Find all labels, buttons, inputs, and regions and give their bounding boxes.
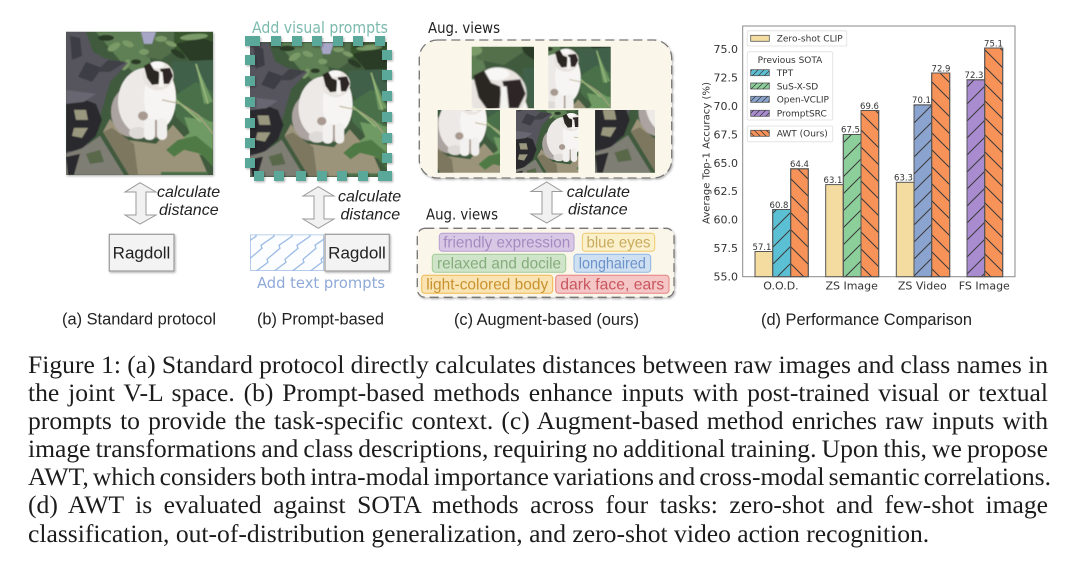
- x axis labels: ZS Image: [825, 280, 878, 292]
- legend: previous SOTA: PromptSRC: [777, 110, 827, 120]
- bar value labels: 60.8: [770, 201, 788, 211]
- bar value labels: 64.4: [790, 160, 809, 170]
- view: bench and cat crop: [516, 110, 578, 173]
- figure caption: [28, 350, 1051, 548]
- bar value labels: [753, 40, 1003, 253]
- caption a: (a) Standard protocol: [62, 310, 216, 328]
- x axis labels: O.O.D.: [763, 280, 799, 292]
- figure caption: AWT, which considers both intra-modal importance variations and cross-modal semantic correlations.: [28, 462, 1051, 491]
- figure caption: prompts to provide the task-specific context. (c) Augment-based method enriches raw inputs with: [28, 406, 1048, 435]
- y axis ticks: 67.5: [714, 128, 738, 141]
- bar value labels: 67.5: [841, 126, 860, 136]
- text prompt block: [250, 234, 324, 271]
- figure caption: Figure 1: (a) Standard protocol directly calculates distances between raw images and class names in: [28, 350, 1048, 379]
- figure caption: the joint V-L space. (b) Prompt-based methods enhance inputs with post-trained visual or textual: [28, 378, 1048, 407]
- panel: performance comparison chart: [702, 26, 1015, 329]
- y axis ticks: 57.5: [714, 242, 738, 255]
- tag: dark face, ears: dark face, ears: [560, 276, 664, 294]
- x axis labels: [763, 280, 1010, 292]
- panel: augment-based: [314, 0, 747, 329]
- legend: previous SOTA: Open-VCLIP: [777, 96, 830, 106]
- tag: relaxed and docile: relaxed and docile: [437, 256, 561, 272]
- bar value labels: 63.3: [894, 174, 913, 184]
- view: body crop: [438, 110, 500, 173]
- legend: baseline: [747, 31, 847, 46]
- y axis ticks: [714, 43, 738, 284]
- panel: prompt-based: [220, 18, 401, 328]
- descriptions panel: [417, 228, 674, 297]
- tag: blue eyes: blue eyes: [586, 234, 650, 252]
- calculate distance label: distance: [568, 202, 628, 218]
- tag: longhaired: longhaired: [579, 256, 646, 272]
- calculate distance label: calculate: [338, 188, 401, 206]
- x axis labels: ZS Video: [898, 280, 947, 292]
- caption c: (c) Augment-based (ours): [454, 311, 639, 329]
- double arrow: [303, 187, 334, 228]
- y axis ticks: 62.5: [714, 185, 738, 198]
- augmented views panel: [419, 40, 672, 178]
- figure caption: image transformations and class descriptions, requiring no additional training. Upon this, we propose: [28, 434, 1048, 463]
- y axis ticks: 60.0: [714, 214, 738, 227]
- view: face crop: [472, 46, 534, 108]
- legend: baseline: Zero-shot CLIP: [777, 34, 843, 44]
- panel: standard protocol: [56, 22, 223, 328]
- calculate distance label: distance: [159, 202, 219, 219]
- bar value labels: 57.1: [753, 243, 771, 253]
- Ragdoll class box: Ragdoll: [328, 244, 386, 262]
- calculate distance label: calculate: [157, 184, 220, 201]
- caption b: (b) Prompt-based: [257, 310, 384, 328]
- bar value labels: 69.6: [860, 102, 879, 112]
- legend: ours: [747, 126, 833, 142]
- legend: previous SOTA: Previous SOTA: [758, 56, 823, 66]
- Ragdoll class box: Ragdoll: [113, 244, 170, 262]
- bar value labels: 72.3: [965, 71, 983, 81]
- Ragdoll class box: [325, 234, 389, 271]
- view: upper right crop: [548, 46, 611, 108]
- figure caption: (d) AWT is evaluated against SOTA methods across four tasks: zero-shot and few-shot image: [28, 490, 1048, 519]
- bar value labels: 63.1: [824, 176, 842, 186]
- view: bench crop: [595, 110, 655, 173]
- legend: previous SOTA: SuS-X-SD: [777, 82, 818, 92]
- y axis ticks: 75.0: [714, 43, 738, 56]
- caption d: (d) Performance Comparison: [761, 311, 972, 329]
- y axis ticks: 72.5: [714, 72, 738, 84]
- bar value labels: 70.1: [912, 96, 931, 106]
- double arrow: [531, 182, 562, 223]
- visual prompts heading: Add visual prompts: [252, 18, 388, 37]
- bar value labels: 75.1: [984, 40, 1003, 50]
- bars: [755, 48, 1003, 277]
- legend: previous SOTA: [747, 52, 833, 120]
- x axis labels: FS Image: [959, 280, 1010, 292]
- y axis title: Average Top-1 Accuracy (%): [702, 82, 712, 224]
- plot frame: [743, 26, 1015, 277]
- bar value labels: 72.9: [932, 64, 950, 74]
- y axis ticks: 65.0: [714, 157, 738, 170]
- figure caption: classification, out-of-distribution generalization, and zero-shot video action recognition.: [28, 518, 929, 548]
- cat photo: [66, 32, 216, 178]
- cat photo with visual prompts: [241, 34, 396, 185]
- Ragdoll class box: [109, 234, 174, 271]
- y axis ticks: 55.0: [714, 270, 738, 284]
- text prompts label: Add text prompts: [257, 274, 385, 292]
- augmented text heading: Aug. views: [426, 206, 498, 224]
- legend: ours: AWT (Ours): [777, 130, 828, 140]
- y axis ticks: 70.0: [714, 100, 738, 113]
- tag: friendly expression: friendly expression: [443, 234, 570, 252]
- legend: previous SOTA: TPT: [776, 69, 794, 79]
- calculate distance label: distance: [340, 206, 400, 224]
- double arrow: [125, 183, 156, 224]
- augmented views heading: Aug. views: [428, 19, 500, 37]
- tag: light-colored body: light-colored body: [426, 276, 548, 294]
- calculate distance label: calculate: [567, 184, 630, 201]
